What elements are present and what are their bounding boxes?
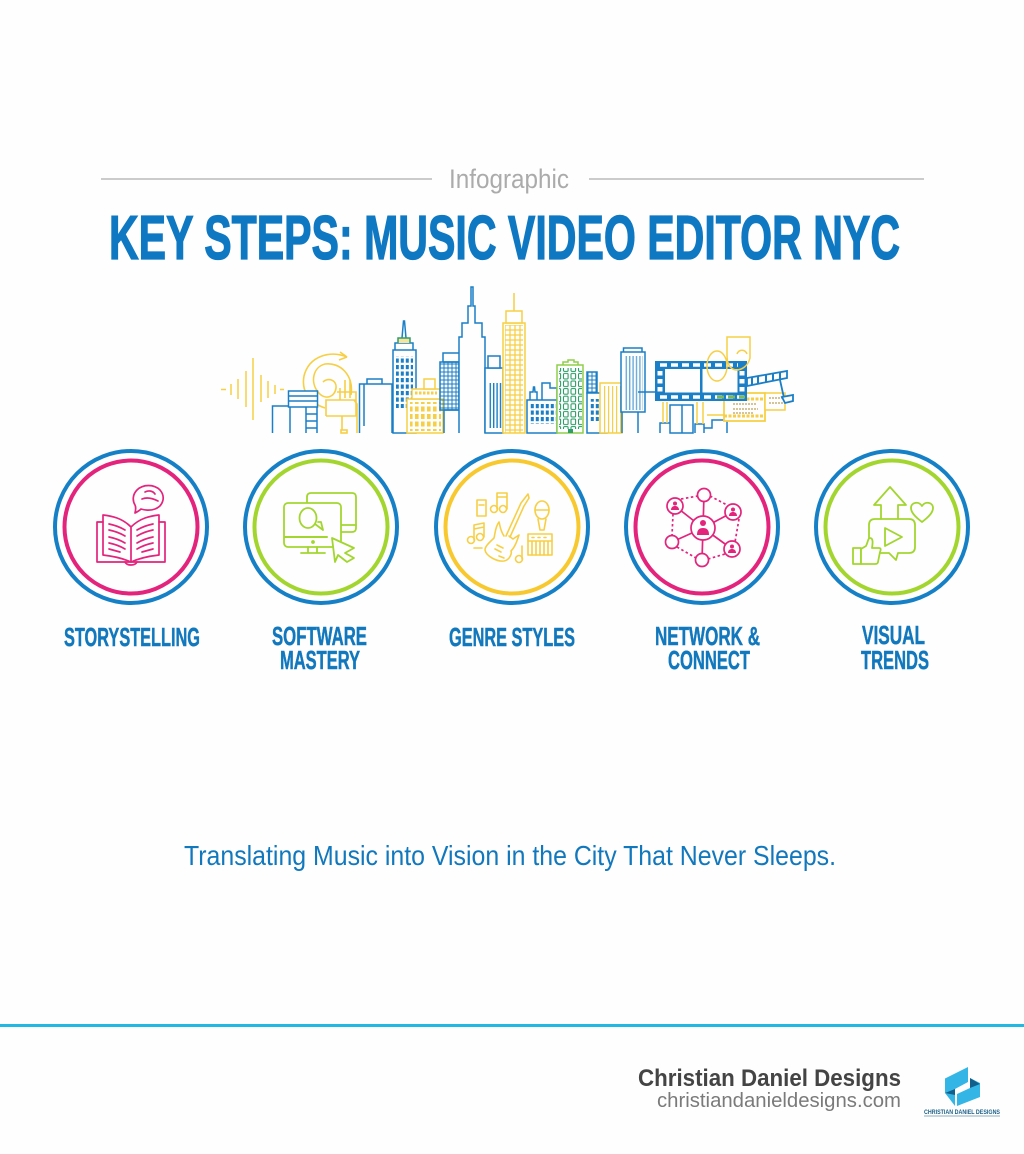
icon: people network xyxy=(666,488,741,566)
label: CONNECT xyxy=(668,645,750,675)
yellow tower xyxy=(503,293,525,433)
icon: monitors with magnifier and cursor xyxy=(284,493,356,562)
step 4: network and connect xyxy=(626,451,778,675)
spiral with arrow xyxy=(303,352,357,433)
label: STORYSTELLING xyxy=(64,622,200,652)
storyboard panels xyxy=(724,393,765,421)
footer: brand name: Christian Daniel Designs xyxy=(638,1065,901,1092)
label xyxy=(655,621,760,675)
footer: logo: CHRISTIAN DANIEL DESIGNS xyxy=(924,1110,1000,1116)
green cap xyxy=(398,338,410,343)
sound wave xyxy=(221,358,284,420)
rings xyxy=(436,451,588,603)
illustration: NYC skyline with sound wave and film strip xyxy=(221,287,793,433)
rings xyxy=(55,451,207,603)
label: MASTERY xyxy=(280,645,360,675)
rings xyxy=(816,451,968,603)
label: SOFTWARE xyxy=(272,621,367,651)
left blue buildings xyxy=(272,321,416,433)
label xyxy=(861,620,929,675)
rings xyxy=(626,451,778,603)
label: NETWORK & xyxy=(655,621,760,651)
right blue and green buildings xyxy=(527,372,607,433)
yellow building xyxy=(407,379,443,433)
rings xyxy=(245,451,397,603)
label: GENRE STYLES xyxy=(449,622,575,652)
label: TRENDS xyxy=(861,645,929,675)
central blue buildings xyxy=(440,287,503,433)
footer rule xyxy=(0,1024,1024,1027)
step 5: visual trends xyxy=(816,451,968,675)
icon: guitar, notes, microphone, keyboard xyxy=(468,493,552,562)
step 3: genre styles xyxy=(436,451,588,652)
label: VISUAL xyxy=(862,620,925,650)
footer: website: christiandanieldesigns.com xyxy=(657,1090,901,1112)
eyebrow: Infographic with rules: Infographic xyxy=(449,164,569,194)
label xyxy=(272,621,367,675)
curling film strip xyxy=(747,371,793,403)
tagline: Translating Music into Vision in the City That Never Sleeps. xyxy=(184,840,836,871)
step 1: storytelling xyxy=(55,451,207,652)
icon: arrow, video bubble, thumb and heart xyxy=(853,487,933,564)
theatre masks over the film strip xyxy=(707,337,750,397)
footer: logo xyxy=(924,1067,1000,1116)
icon: open book with speech bubble xyxy=(97,486,165,565)
film strip xyxy=(655,361,747,401)
step 2: software mastery xyxy=(245,451,397,675)
